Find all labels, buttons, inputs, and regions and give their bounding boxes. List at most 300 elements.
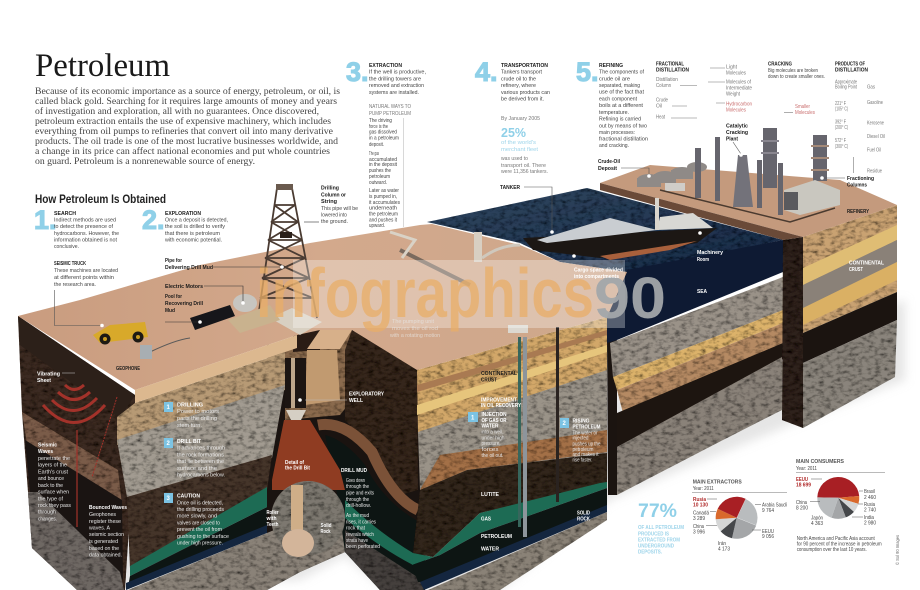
- text: drill mud: through the: [346, 497, 369, 503]
- seismic waves: [43, 385, 117, 527]
- label: seismic truck: [54, 261, 118, 327]
- chart: main extractors pie: 3 289: [693, 516, 705, 522]
- step 5: refining: main processes:: [599, 130, 635, 136]
- label: seismic truck: at different points within: [54, 275, 114, 281]
- text: rising petroleum: petroleum: [572, 447, 594, 453]
- text: seismic waves: Seismic: [38, 442, 57, 448]
- fractional distillation diagram: DISTILLATION: [656, 68, 689, 74]
- chart: main extractors pie: 10 130: [693, 502, 708, 508]
- text: rising petroleum: 2: [562, 421, 566, 427]
- label: machinery room: Room: [697, 257, 709, 263]
- step: drill bit: the rock formations: [177, 452, 224, 458]
- label: roller with teeth: Teeth: [266, 522, 278, 528]
- label: drilling column: lowered into: [321, 212, 347, 218]
- products of distillation: DISTILLATION: [835, 68, 868, 74]
- refinery block: [600, 165, 897, 428]
- label: vibrating sheet: Sheet: [37, 378, 51, 384]
- step: drill bit: hydrocarbons below.: [177, 473, 225, 479]
- left block front layers: [117, 348, 345, 590]
- natural ways to pump petroleum: the petroleum: [369, 212, 398, 218]
- step 3: extraction: [346, 57, 427, 96]
- step 4: transportation: [475, 57, 550, 103]
- central block front layers: [412, 317, 607, 590]
- products of distillation: Gasoline: [867, 100, 883, 106]
- products of distillation: Diesel Oil: [867, 134, 885, 140]
- text: drill mud: reveals which: [346, 532, 374, 538]
- products of distillation: (300° C): [835, 144, 848, 150]
- text: seismic waves: the type of: [38, 496, 63, 502]
- text: bounced waves: data obtained.: [89, 552, 122, 558]
- products of distillation: (200° C): [835, 125, 848, 131]
- text: drill mud: rock that: [346, 525, 365, 531]
- label: catalytic cracking plant: Cracking: [726, 130, 748, 136]
- stratum labels: PETROLEUM: [481, 534, 512, 540]
- stratum labels: GAS: [481, 516, 491, 522]
- text: improvement in oil recovery: INJECTION: [482, 412, 507, 418]
- label: pipe for delivering drill mud: [165, 258, 284, 271]
- text: rising petroleum: pushes up the: [572, 441, 600, 447]
- stratum labels: WATER: [481, 546, 499, 552]
- natural ways to pump petroleum: The gas: [369, 151, 379, 157]
- natural ways to pump petroleum: force is the: [369, 124, 388, 130]
- step 1: search: hydrocarbons. However, the: [54, 231, 119, 237]
- label: continental crust right: [849, 260, 885, 273]
- drilling rig: [258, 184, 322, 335]
- natural ways to pump petroleum: NATURAL WAYS TO: [369, 104, 411, 110]
- step 2: exploration: [142, 205, 228, 244]
- callout: 77 percent: PRODUCED IS: [638, 532, 669, 538]
- step 4: transportation: various products can: [501, 90, 550, 96]
- label: catalytic cracking plant: [726, 124, 748, 157]
- step: caution: under high pressure.: [177, 541, 223, 547]
- chart: main consumers pie: Year: 2011: [796, 466, 817, 472]
- step: drill bit: 2: [166, 441, 170, 447]
- panel: cross-section illustration: [18, 128, 905, 590]
- chart: main consumers pie: 18 699: [796, 483, 811, 489]
- text: bounced waves: register these: [89, 519, 121, 525]
- text: seismic waves: penetrate the: [38, 456, 70, 462]
- label: fractioning columns: [820, 176, 874, 188]
- label: electric motors: [165, 284, 245, 305]
- label: pool for recovering drill mud: [165, 294, 203, 324]
- process columns: [695, 128, 829, 215]
- step: drill bit: [164, 438, 225, 479]
- cracking note: [768, 62, 825, 116]
- step 4: transportation: Tankers transport: [501, 70, 542, 76]
- step 5: refining: each component: [599, 96, 637, 102]
- chart: main extractors pie: Year: 2011: [693, 486, 714, 492]
- credit: © Sol 90 Images: [894, 534, 900, 565]
- label: tanker: TANKER: [500, 185, 520, 191]
- text: improvement in oil recovery: WATER: [482, 424, 499, 430]
- label: crude-oil deposit: Deposit: [598, 166, 617, 172]
- intro text block: Because of its economic importance as a source of energy, petroleum, or oil, is: [35, 86, 340, 96]
- step: drilling: parts the drilling: [177, 416, 217, 422]
- label: crude-oil deposit: Crude-Oil: [598, 159, 620, 165]
- intro text block: a change in its price can affect national economies and put whole countries: [35, 146, 330, 156]
- step 4: transportation: 4.: [475, 57, 498, 87]
- label: pump caption: with a rotating motion: [389, 333, 440, 339]
- step: drilling: Power to motors: [177, 409, 219, 415]
- products of distillation: Kerosene: [867, 120, 884, 126]
- label: continental crust right: CONTINENTAL: [849, 260, 885, 266]
- text: drill mud: Goes down: [346, 478, 365, 484]
- text: seismic waves: back to the: [38, 483, 63, 489]
- callout: 77 percent: 77%: [638, 501, 677, 522]
- callout: 25 percent of fleet: transport oil. There: [501, 163, 546, 169]
- chart: main extractors pie: 9 056: [762, 534, 774, 540]
- chart: main extractors pie: 9 764: [762, 508, 774, 514]
- text: bounced waves: based on the: [89, 546, 119, 552]
- step: drilling: stem turn.: [177, 423, 202, 429]
- intro text block: products. The oil trade is one of the most lucrative businesses worldwide, and: [35, 136, 338, 146]
- label: pool for recovering drill mud: Mud: [165, 308, 175, 314]
- natural ways to pump petroleum: is pumped in,: [369, 194, 397, 200]
- chart: main extractors pie: EEUU: [762, 529, 774, 535]
- chart: main consumers pie: China: [796, 500, 807, 506]
- label: geophone: GEOPHONE: [116, 366, 140, 372]
- natural ways to pump petroleum: accumulated: [369, 157, 397, 163]
- sea: [427, 188, 783, 343]
- step 4: transportation: be derived from it.: [501, 97, 544, 103]
- label: drilling column: Column or: [321, 192, 347, 198]
- chart: main extractors pie: [692, 480, 787, 552]
- step 3: extraction: If the well is productive,: [369, 70, 427, 76]
- fractional distillation diagram: [656, 62, 752, 120]
- cracking note: down to create smaller ones.: [768, 74, 825, 80]
- text: drill mud: pipe and exits: [346, 491, 374, 497]
- fractional distillation diagram: Light: [726, 64, 737, 70]
- watermark: 90: [594, 266, 666, 331]
- step 2: exploration: with economic potential.: [164, 238, 222, 244]
- stratum labels: LUTITE: [481, 492, 499, 498]
- step: caution: prevent the oil from: [177, 527, 222, 533]
- natural ways to pump petroleum: deposit.: [369, 142, 384, 148]
- step 2: exploration: 2.: [142, 205, 165, 235]
- text: rising petroleum: RISING: [572, 418, 590, 424]
- step 5: refining: Refining is carried: [599, 117, 641, 123]
- products of distillation: Gas: [867, 84, 875, 90]
- natural ways to pump petroleum: petroleum: [369, 174, 390, 180]
- intro text block: [35, 86, 340, 166]
- fractional distillation diagram: Intermediate: [726, 86, 752, 92]
- label: machinery room: [697, 231, 723, 263]
- step 2: exploration: the soil is drilled to verify: [165, 224, 225, 230]
- fractional distillation diagram: Molecules of: [726, 80, 751, 86]
- label: catalytic cracking plant: Catalytic: [726, 124, 748, 130]
- fractional distillation diagram: Heat: [656, 114, 665, 120]
- text: consumption note: consumption over the last 10 years.: [797, 547, 867, 553]
- text: bounced waves: waves. A: [88, 526, 110, 532]
- callout: 25 percent of fleet: merchant fleet: [501, 147, 539, 153]
- step: caution: [164, 493, 229, 547]
- label: roller with teeth: [266, 510, 279, 528]
- step: caution: valves are closed to: [177, 520, 220, 526]
- step 4: transportation: crude oil to the: [501, 76, 536, 82]
- stratum labels: ROCK: [577, 516, 590, 522]
- step: drilling: 1: [166, 405, 170, 411]
- label: continental crust center: [481, 371, 518, 384]
- step: drill bit: that lie between the: [177, 459, 224, 465]
- label: detail of the drill bit: Detail of: [285, 460, 304, 466]
- intro text block: everything from oil pumps to refineries that convert oil into many derivative: [35, 126, 333, 136]
- label: sea: SEA: [697, 289, 707, 295]
- label: pump caption: The pumping unit: [392, 319, 435, 325]
- label: drilling column: Drilling: [321, 186, 339, 192]
- label: roller with teeth: with: [266, 516, 276, 522]
- label: drilling column: [304, 186, 358, 225]
- label: crude-oil deposit: [598, 159, 651, 178]
- text: improvement in oil recovery: pressure,: [482, 441, 501, 447]
- text: improvement in oil recovery: IMPROVEMENT: [481, 398, 518, 404]
- label: solid rock at bit: [320, 523, 332, 535]
- text: seismic waves: layers of the: [38, 463, 67, 469]
- chart: main extractors pie: Irán: [718, 541, 726, 547]
- products of distillation: Fuel Oil: [867, 148, 881, 154]
- chart: main extractors pie: Rusia: [693, 497, 707, 503]
- label: seismic truck: SEISMIC TRUCK: [54, 261, 86, 267]
- label: continental crust center: CONTINENTAL: [481, 371, 518, 377]
- step 2: exploration: EXPLORATION: [165, 211, 201, 217]
- notch backing: [267, 330, 425, 590]
- text: rising petroleum: [560, 418, 601, 463]
- chart: main extractors pie: Arabia Saudí: [762, 502, 787, 508]
- step 1: search: conclusive.: [54, 244, 79, 250]
- text: bounced waves: seismic section: [89, 532, 124, 538]
- step 1: search: information obtained is not: [54, 238, 117, 244]
- label: roller with teeth: Roller: [266, 510, 279, 516]
- fractional distillation diagram: Weight: [726, 92, 740, 98]
- chart: main consumers pie: Rusia: [864, 502, 875, 508]
- label: solid rock at bit: Rock: [320, 529, 330, 535]
- label: electric motors: Electric Motors: [165, 284, 203, 290]
- left block side face: [18, 316, 135, 590]
- text: consumption note: North America and Pacific Asia account: [797, 536, 875, 542]
- products of distillation: [835, 62, 885, 174]
- text: seismic waves: [38, 442, 71, 522]
- products of distillation: Residue: [867, 168, 882, 174]
- label: pipe for delivering drill mud: Delivering Drill Mud: [165, 265, 213, 271]
- label: fractioning columns: Fractioning: [847, 176, 874, 182]
- label: exploratory well: WELL: [349, 398, 364, 404]
- text: consumption note: for 90 percent of the increase in petroleum: [797, 542, 882, 548]
- step 2: exploration: that there is petroleum: [165, 231, 221, 237]
- text: drill mud: been perforated: [346, 544, 380, 550]
- step: drilling: DRILLING: [177, 402, 203, 408]
- chart: main extractors pie: 4 173: [718, 546, 730, 552]
- chart: main consumers pie: [796, 459, 885, 527]
- step 4: transportation: TRANSPORTATION: [501, 63, 548, 69]
- fractional distillation diagram: Crude: [656, 98, 668, 104]
- step 1: search: [34, 205, 119, 250]
- fractional distillation diagram: Hydrocarbon: [726, 102, 752, 108]
- label: continental crust right: CRUST: [849, 267, 864, 273]
- products of distillation: 221° F: [835, 101, 846, 107]
- products of distillation: PRODUCTS OF: [835, 62, 866, 68]
- cracking note: Molecules: [795, 110, 815, 116]
- fractional distillation diagram: Oil: [656, 104, 662, 110]
- text: rising petroleum: PETROLEUM: [572, 424, 601, 430]
- chart: main consumers pie: 2 460: [864, 495, 876, 501]
- ground shadow: [30, 300, 905, 590]
- step 5: refining: separated, making: [599, 83, 640, 89]
- chart: main consumers pie: EEUU: [796, 477, 808, 483]
- natural ways to pump petroleum: and pushes it: [369, 218, 398, 224]
- text: drill mud: As the mud: [346, 513, 369, 519]
- stratum labels: SOLID: [577, 510, 590, 516]
- step 1: search: 1.: [34, 205, 57, 235]
- callout: 77 percent: OF ALL PETROLEUM: [638, 525, 684, 531]
- label: exploratory well: [298, 392, 384, 404]
- text: bounced waves: Bounced Waves: [89, 505, 127, 511]
- step 2: exploration: Once a deposit is detected,: [165, 218, 228, 224]
- text: seismic waves: through: [38, 510, 56, 516]
- text: rising petroleum: The water or: [572, 430, 598, 436]
- text: rising petroleum: and makes it: [572, 452, 599, 458]
- products of distillation: Approximate: [835, 80, 857, 86]
- natural ways to pump petroleum: in the deposit: [369, 162, 398, 168]
- natural ways to pump petroleum: it accumulates: [369, 200, 400, 206]
- label: vibrating sheet: [37, 372, 75, 384]
- text: bounced waves: [88, 505, 127, 558]
- text: seismic waves: and bounce: [38, 476, 64, 482]
- products of distillation: (105° C): [835, 106, 848, 112]
- text: improvement in oil recovery: OF GAS OR: [482, 418, 507, 424]
- intro text block: petroleum extraction entails the use of expensive machinery, which includes: [35, 116, 331, 126]
- label: pool for recovering drill mud: Pool for: [165, 294, 183, 300]
- products of distillation: 392° F: [835, 120, 846, 126]
- step 5: refining: fractional distillation: [599, 137, 648, 143]
- step: caution: 3: [166, 496, 170, 502]
- step 5: refining: out by means of two: [599, 123, 647, 129]
- chart: main extractors pie: China: [693, 524, 704, 530]
- text: rising petroleum: rise faster.: [572, 457, 592, 463]
- watermark: infographics: [256, 254, 594, 332]
- text: improvement in oil recovery: IN OIL RECOVERY: [481, 403, 521, 409]
- label: detail of the drill bit: [285, 460, 310, 472]
- chart: main extractors pie: 3 996: [693, 530, 705, 536]
- label: solid rock at bit: Solid: [320, 523, 332, 529]
- natural ways to pump petroleum: [369, 104, 411, 229]
- step 5: refining: 5.: [576, 57, 599, 87]
- label: seismic truck: the research area.: [54, 282, 96, 288]
- label: refinery: REFINERY: [847, 209, 869, 215]
- text: drill mud: DRILL MUD: [341, 468, 367, 474]
- fractional distillation diagram: FRACTIONAL: [656, 62, 685, 68]
- callout: 77 percent: DEPOSITS.: [638, 550, 662, 556]
- text: drill mud: through the: [346, 484, 369, 490]
- text: seismic waves: Waves: [38, 449, 53, 455]
- exploratory well with drill: [271, 358, 345, 557]
- chart: main consumers pie: India: [864, 515, 874, 521]
- step: drill bit: It advances through: [177, 446, 225, 452]
- step 1: search: SEARCH: [54, 211, 76, 217]
- label: tanker: [500, 185, 554, 234]
- natural ways to pump petroleum: pushes the: [369, 168, 391, 174]
- chart: main consumers pie: 2 740: [864, 508, 876, 514]
- chart: main consumers pie: Brasil: [864, 489, 875, 495]
- step: drilling: [164, 402, 219, 429]
- oil pumps and pipes: [390, 232, 528, 333]
- natural ways to pump petroleum: gas dissolved: [369, 130, 397, 136]
- plant building: [784, 180, 840, 215]
- label: pipe for delivering drill mud: Pipe for: [165, 258, 183, 264]
- step 1: search: to detect the presence of: [54, 224, 113, 230]
- callout: 77 percent: [638, 501, 684, 556]
- step: drill bit: surface and the: [177, 466, 217, 472]
- fractional distillation diagram: Molecules: [726, 70, 746, 76]
- chart: main consumers pie: 8 200: [796, 506, 808, 512]
- cracking note: CRACKING: [768, 62, 792, 68]
- sea block layers: [607, 277, 790, 495]
- chart: main consumers pie: MAIN CONSUMERS: [796, 459, 844, 465]
- callout: 25 percent of fleet: 25%: [501, 126, 526, 140]
- label: cargo space: into compartments: [574, 274, 619, 280]
- text: improvement in oil recovery: forces: [482, 447, 499, 453]
- label: cargo space: Cargo space divided: [574, 268, 623, 274]
- step: caution: the drilling proceeds: [177, 507, 224, 513]
- seismic truck: [93, 322, 148, 344]
- text: bounced waves: is generated: [89, 539, 118, 545]
- callout: 25 percent of fleet: [500, 116, 548, 175]
- wells: [518, 327, 559, 537]
- rear wall of the well notch: [285, 330, 352, 420]
- label: machinery room: Machinery: [697, 250, 723, 256]
- text: improvement in oil recovery: 1: [471, 416, 475, 422]
- step: drill bit: DRILL BIT: [177, 439, 202, 445]
- stratum labels: [481, 492, 590, 552]
- label: pump caption: moves the oil rod: [392, 326, 438, 332]
- text: improvement in oil recovery: into a well,: [482, 430, 504, 436]
- label: detail of the drill bit: the Drill Bit: [285, 466, 310, 472]
- step 3: extraction: the drilling towers are: [369, 76, 421, 82]
- natural ways to pump petroleum: PUMP PETROLEUM: [369, 111, 411, 117]
- step 5: refining: and cracking.: [599, 143, 629, 149]
- text: seismic waves: surface when: [38, 490, 69, 496]
- step 5: refining: crude oil are: [599, 76, 630, 82]
- text: seismic waves: changes.: [38, 516, 57, 522]
- chart: main consumers pie: 2 980: [864, 520, 876, 526]
- text: improvement in oil recovery: under high: [482, 436, 504, 442]
- natural ways to pump petroleum: underneath: [369, 206, 397, 212]
- text: bounced waves: Geophones: [89, 512, 116, 518]
- fractional distillation diagram: Molecules: [726, 108, 746, 114]
- natural ways to pump petroleum: Later as water: [369, 188, 399, 194]
- natural ways to pump petroleum: outward.: [369, 180, 387, 186]
- step 3: extraction: 3.: [346, 57, 369, 87]
- label: vibrating sheet: Vibrating: [37, 372, 60, 378]
- label: continental crust center: CRUST: [481, 378, 498, 384]
- land surface: [18, 224, 627, 403]
- fractional distillation diagram: Column: [656, 83, 671, 89]
- text: drill mud: rises, it carries: [346, 520, 376, 526]
- step: caution: CAUTION: [177, 494, 200, 500]
- storage tanks: [637, 162, 707, 191]
- step: caution: Once oil is detected,: [177, 500, 223, 506]
- heading: how petroleum is obtained: How Petroleum Is Obtained: [35, 194, 166, 206]
- intro text block: called black gold. Searching for it requires large amounts of money and years: [35, 96, 337, 106]
- chart: main extractors pie: Canadá: [693, 510, 709, 516]
- callout: 25 percent of fleet: of the world's: [501, 140, 536, 146]
- text: improvement in oil recovery: [468, 398, 521, 459]
- tanker: [523, 198, 717, 260]
- label: drilling column: the ground.: [321, 219, 348, 225]
- chart: main consumers pie: Japón: [811, 516, 823, 522]
- text: improvement in oil recovery: the oil out.: [482, 453, 504, 459]
- label: exploratory well: EXPLORATORY: [349, 392, 384, 398]
- step 4: transportation: refinery, where: [501, 83, 536, 89]
- fractional distillation diagram: Distillation: [656, 77, 678, 83]
